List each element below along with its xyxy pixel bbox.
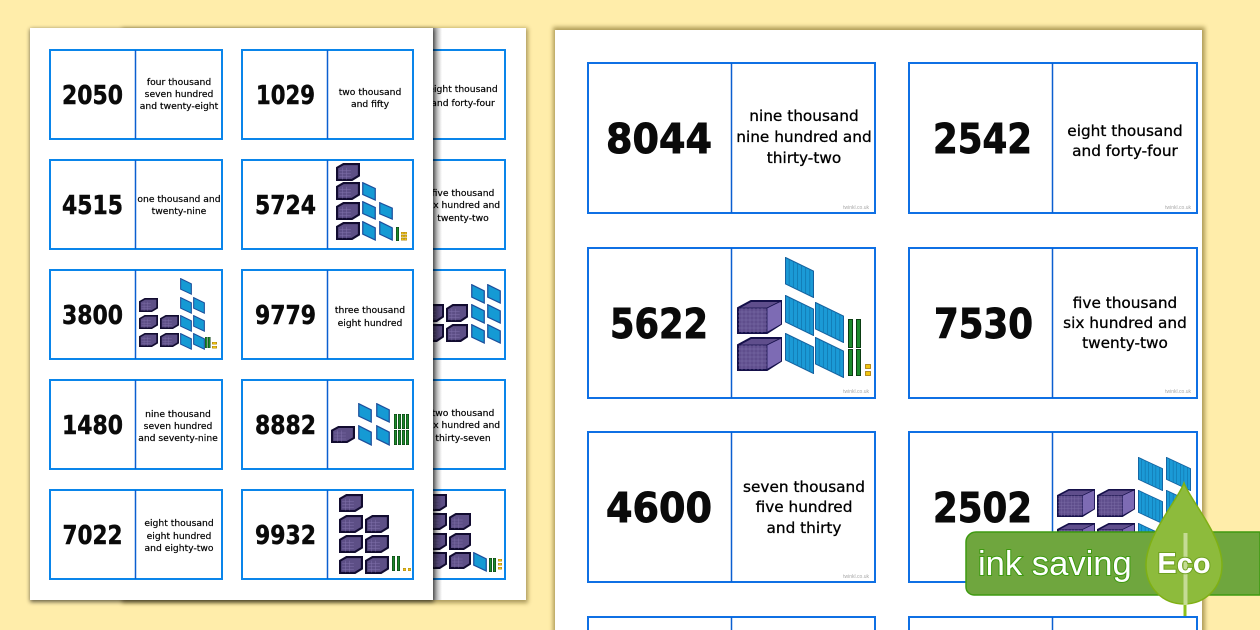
- card 2502: 2502: [933, 484, 1032, 532]
- back card row 2: twenty-two: [437, 213, 489, 224]
- card 4600: twinkl.co.uk: [843, 574, 869, 580]
- card 7530: five thousand: [1073, 294, 1177, 312]
- card 3800: 3800: [62, 301, 123, 331]
- card 1029: two thousand: [339, 87, 401, 98]
- card 7530: [909, 248, 1197, 398]
- card 7022: and eighty-two: [144, 543, 214, 554]
- card 2050: 2050: [62, 81, 123, 111]
- card 4600: and thirty: [767, 519, 841, 537]
- partial card row 4 left: [588, 617, 875, 630]
- card 5724: [242, 160, 413, 249]
- panel: front worksheet page: [30, 28, 434, 602]
- card 3800: [50, 270, 222, 359]
- back card row 1: [330, 50, 505, 139]
- card 1480: seven hundred: [144, 421, 212, 432]
- card 1029: 1029: [256, 81, 315, 111]
- back card row 2: six hundred and: [426, 200, 500, 211]
- card 2502: [909, 432, 1197, 582]
- card 1480: nine thousand: [145, 409, 211, 420]
- back card row 4: thirty-seven: [435, 433, 491, 444]
- panel: back worksheet page: [122, 28, 528, 603]
- card 4600: five hundred: [756, 498, 852, 516]
- card 2050: four thousand: [147, 77, 211, 88]
- card 5724: 5724: [255, 191, 316, 221]
- badge bar: [966, 532, 1260, 595]
- card 1029: and fifty: [351, 99, 390, 110]
- card 1480: [50, 380, 222, 469]
- card 5622: twinkl.co.uk: [843, 389, 869, 395]
- back card row 4: six hundred and: [426, 420, 500, 431]
- leaf label: Eco: [1157, 548, 1211, 580]
- badge label: ink saving: [978, 545, 1132, 583]
- panel: right worksheet page: [553, 27, 1205, 630]
- card 2050: [50, 50, 222, 139]
- card 5622: [588, 248, 875, 398]
- card 7022: 7022: [62, 521, 122, 551]
- card 2542: eight thousand: [1067, 122, 1183, 140]
- card 9779: [242, 270, 413, 359]
- card 4600: [588, 432, 875, 582]
- card 8044: thirty-two: [767, 149, 841, 167]
- back card row 4: two thousand: [432, 408, 494, 419]
- card 2050: seven hundred: [145, 89, 213, 100]
- back card row 4: [330, 380, 505, 469]
- card 2542: 2542: [933, 115, 1032, 163]
- card 7022: [50, 490, 222, 579]
- card 5622: 5622: [610, 300, 708, 348]
- back card row 2: five thousand: [432, 188, 494, 199]
- card 7530: 7530: [934, 300, 1033, 348]
- back card row 1: and forty-four: [431, 98, 495, 109]
- card 9779: eight hundred: [338, 318, 402, 329]
- card 7022: eight thousand: [144, 518, 214, 529]
- card 2542: and forty-four: [1072, 142, 1179, 160]
- card 4515: [50, 160, 222, 249]
- card 8044: nine hundred and: [736, 128, 872, 146]
- back card row 1: eight thousand: [428, 84, 498, 95]
- card 2542: [909, 63, 1197, 213]
- card 8882: 8882: [255, 411, 316, 441]
- card 4515: one thousand and: [137, 194, 221, 205]
- back card row 5: [330, 490, 505, 579]
- card 2050: and twenty-eight: [140, 101, 219, 112]
- card 9932: 9932: [255, 521, 316, 551]
- card 9779: 9779: [255, 301, 316, 331]
- icon: leaf drop: [1146, 483, 1222, 616]
- card 4600: seven thousand: [743, 478, 865, 496]
- card 9779: three thousand: [335, 305, 405, 316]
- card 1480: and seventy-nine: [138, 433, 218, 444]
- card 9932: [242, 490, 413, 579]
- card 8044: nine thousand: [749, 107, 859, 125]
- partial card row 4 right: [909, 617, 1197, 630]
- back card row 2: [330, 160, 505, 249]
- card 8044: twinkl.co.uk: [843, 205, 869, 211]
- card 4515: twenty-nine: [152, 206, 207, 217]
- card 7530: twinkl.co.uk: [1165, 389, 1191, 395]
- card 8044: [588, 63, 875, 213]
- card 7530: twenty-two: [1082, 334, 1168, 352]
- card 4515: 4515: [62, 191, 123, 221]
- back card row 3: [330, 270, 505, 359]
- card 4600: 4600: [606, 484, 712, 532]
- card 7022: eight hundred: [147, 531, 211, 542]
- card 2542: twinkl.co.uk: [1165, 205, 1191, 211]
- badge: ink saving eco: [966, 483, 1260, 616]
- card 8882: [242, 380, 413, 469]
- card 1029: [242, 50, 413, 139]
- card 7530: six hundred and: [1063, 314, 1187, 332]
- card 1480: 1480: [62, 411, 123, 441]
- shadow of front page: [433, 28, 442, 600]
- card 8044: 8044: [606, 115, 712, 163]
